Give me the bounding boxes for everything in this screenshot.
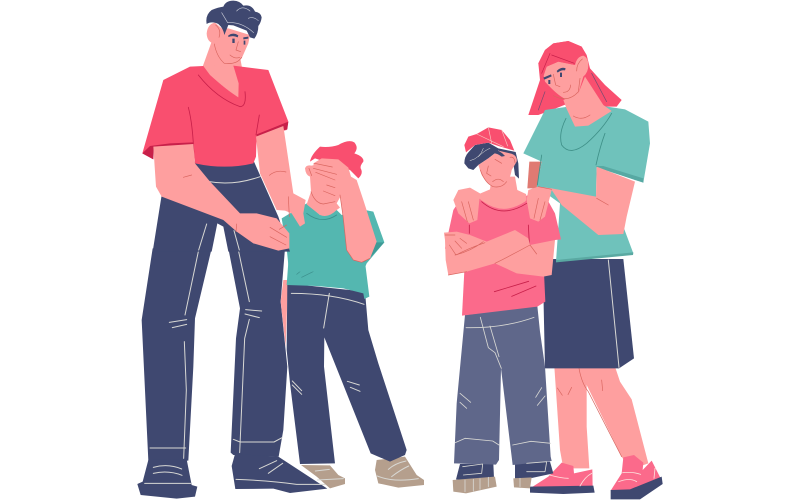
woman: face [543, 56, 588, 100]
boy in cap: shirt folds [494, 281, 536, 296]
boy in cap: face [478, 151, 517, 188]
boy in cap: crossed arms [444, 230, 555, 277]
boy in cap: red cap [464, 127, 514, 152]
man: arm and hand, right [256, 126, 306, 227]
boy in cap: hair back [464, 143, 519, 179]
boy: shirt shadow [363, 242, 384, 262]
woman: neck [563, 77, 612, 127]
boy: neck and face [305, 162, 348, 216]
boy with covered eyes: body and legs [281, 248, 424, 488]
boy in cap: shirt and crossed arms [444, 177, 561, 285]
woman: arm and hands on boy's shoulders [453, 167, 635, 235]
man: hair [206, 1, 262, 39]
boy in cap: pink shirt [445, 195, 561, 285]
woman: fringe [538, 41, 586, 79]
man: red shirt [142, 66, 288, 167]
boy in cap: legs and shoes [453, 306, 553, 493]
man: upper body [142, 42, 306, 252]
man: legs and shoes [137, 248, 327, 499]
boy in cap: neck [477, 177, 526, 209]
boy: hair [310, 141, 363, 178]
boy: head, teal shirt and raised arm [282, 141, 384, 272]
boy in cap: lower shirt [462, 258, 545, 316]
woman: navy skirt [543, 259, 634, 368]
man: arm and hand, left [153, 144, 289, 251]
boy in cap: head [464, 127, 519, 188]
man: neck and face [203, 23, 250, 67]
man: neck [203, 42, 246, 98]
boy: raised arm and hand [313, 158, 377, 262]
boy: teal shirt [282, 203, 384, 272]
woman: head [538, 41, 612, 127]
man: eyes and brows [228, 34, 248, 45]
woman: legs [530, 259, 663, 499]
boy: collar [307, 213, 337, 220]
woman: back hair [528, 41, 622, 115]
man: head [203, 1, 262, 67]
man: waist of pants [153, 162, 290, 252]
woman: shoes [530, 455, 663, 499]
woman: torso and shirt [523, 106, 650, 262]
